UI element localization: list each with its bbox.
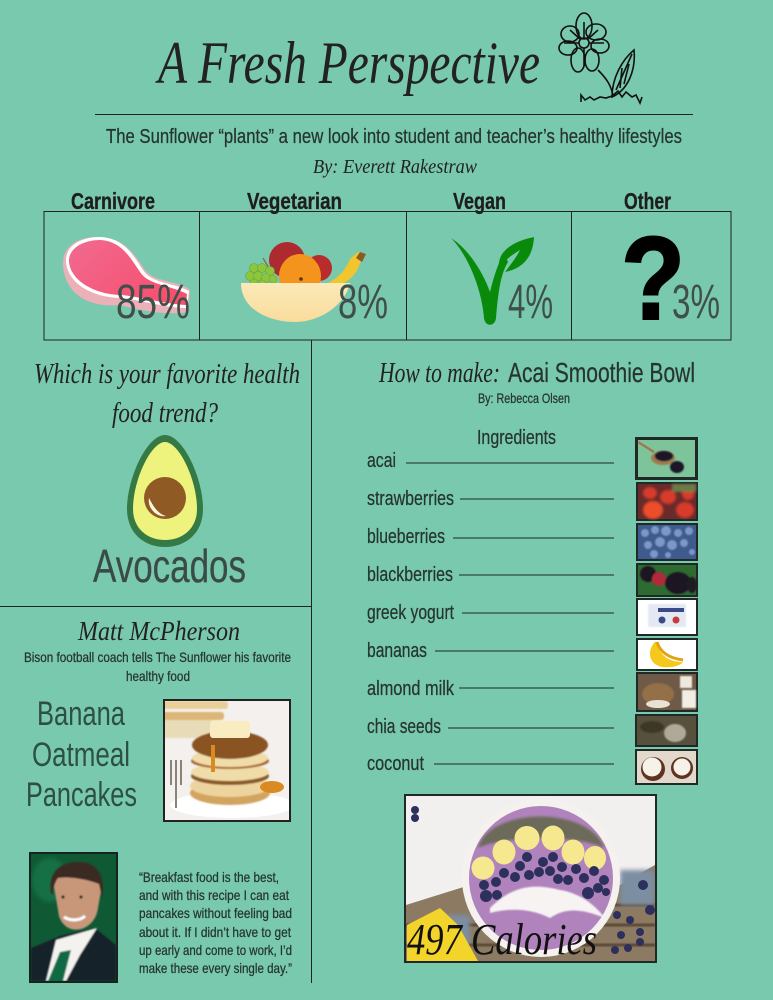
icon: avocado bbox=[127, 435, 203, 547]
photo: smoothie bowl bbox=[404, 794, 657, 964]
name heading: Matt McPherson bbox=[77, 616, 240, 646]
photo: bananas bbox=[636, 638, 698, 671]
panel: favorite food trend bbox=[34, 359, 300, 592]
panel: diet table bbox=[44, 188, 731, 345]
rule under title bbox=[95, 114, 693, 116]
ingredient list bbox=[367, 450, 455, 775]
ingredient list: almond milk bbox=[367, 678, 455, 700]
photo: greek yogurt bbox=[636, 598, 698, 636]
quote: make these every single day.” bbox=[139, 960, 292, 976]
stat: 4%: 4% bbox=[508, 276, 553, 329]
photo: almond milk bbox=[636, 672, 698, 712]
intro line two: healthy food bbox=[126, 668, 190, 684]
recipe name bbox=[26, 695, 137, 814]
stat: 8%: 8% bbox=[338, 276, 388, 329]
photo: acai bbox=[635, 437, 698, 480]
heading: carnivore: Carnivore bbox=[71, 188, 155, 214]
heading: other: Other bbox=[624, 188, 671, 214]
question heading line two: food trend? bbox=[112, 398, 218, 429]
ingredient list: blueberries bbox=[367, 526, 445, 548]
recipe byline: By: Rebecca Olsen bbox=[478, 390, 570, 406]
quote: “Breakfast food is the best, bbox=[139, 869, 279, 885]
photo: coconut bbox=[635, 749, 698, 785]
ingredient list: chia seeds bbox=[367, 716, 441, 738]
heading: vegetarian: Vegetarian bbox=[247, 188, 342, 214]
icon: meat bbox=[63, 237, 190, 313]
ingredient list: greek yogurt bbox=[367, 602, 454, 624]
ingredient leader lines bbox=[406, 463, 614, 764]
icon: question mark: ? bbox=[621, 213, 685, 345]
title: A Fresh Perspective bbox=[155, 30, 540, 96]
table grid bbox=[44, 211, 731, 340]
photo: coach portrait bbox=[29, 852, 118, 983]
photo: chia seeds bbox=[635, 714, 698, 747]
ingredient list: blackberries bbox=[367, 564, 453, 586]
answer: avocados: Avocados bbox=[93, 540, 246, 592]
photo: blueberries bbox=[636, 523, 698, 561]
recipe name: Oatmeal bbox=[32, 736, 130, 774]
quote: about it. If I didn’t have to get bbox=[139, 924, 291, 940]
stat: 85%: 85% bbox=[116, 276, 190, 329]
icon: flower sketch bbox=[559, 13, 642, 103]
ingredient list: strawberries bbox=[367, 488, 454, 510]
panel: Matt McPherson bbox=[24, 616, 294, 983]
photo: strawberries bbox=[636, 482, 698, 521]
recipe heading script: How to make: bbox=[378, 358, 500, 389]
quote: pancakes without feeling bad bbox=[139, 905, 292, 921]
calories label: 497 Calories bbox=[407, 915, 597, 964]
ingredient list: coconut bbox=[367, 753, 424, 775]
quote: and with this recipe I can eat bbox=[139, 887, 289, 903]
stat: 3%: 3% bbox=[672, 276, 720, 329]
ingredient list: acai bbox=[367, 450, 396, 472]
recipe name: Banana bbox=[37, 695, 125, 733]
icon: fruit bowl bbox=[241, 242, 366, 322]
recipe heading name: Acai Smoothie Bowl bbox=[508, 357, 695, 388]
photo: blackberries bbox=[636, 563, 698, 597]
intro line one: Bison football coach tells The Sunflower his favorite bbox=[24, 649, 291, 665]
ingredient list: bananas bbox=[367, 640, 427, 662]
byline: By: Everett Rakestraw bbox=[313, 156, 478, 178]
heading: vegan: Vegan bbox=[453, 188, 506, 214]
photo: pancakes bbox=[160, 699, 294, 822]
icon: vegan V leaf bbox=[451, 237, 534, 325]
recipe name: Pancakes bbox=[26, 776, 137, 814]
ingredients heading: Ingredients bbox=[477, 427, 556, 449]
quote: up early and come to work, I’d bbox=[139, 942, 292, 958]
panel: acai smoothie recipe bbox=[367, 357, 698, 964]
quote bbox=[139, 869, 292, 976]
panel dividers bbox=[0, 340, 312, 983]
question heading: Which is your favorite health bbox=[34, 359, 300, 390]
